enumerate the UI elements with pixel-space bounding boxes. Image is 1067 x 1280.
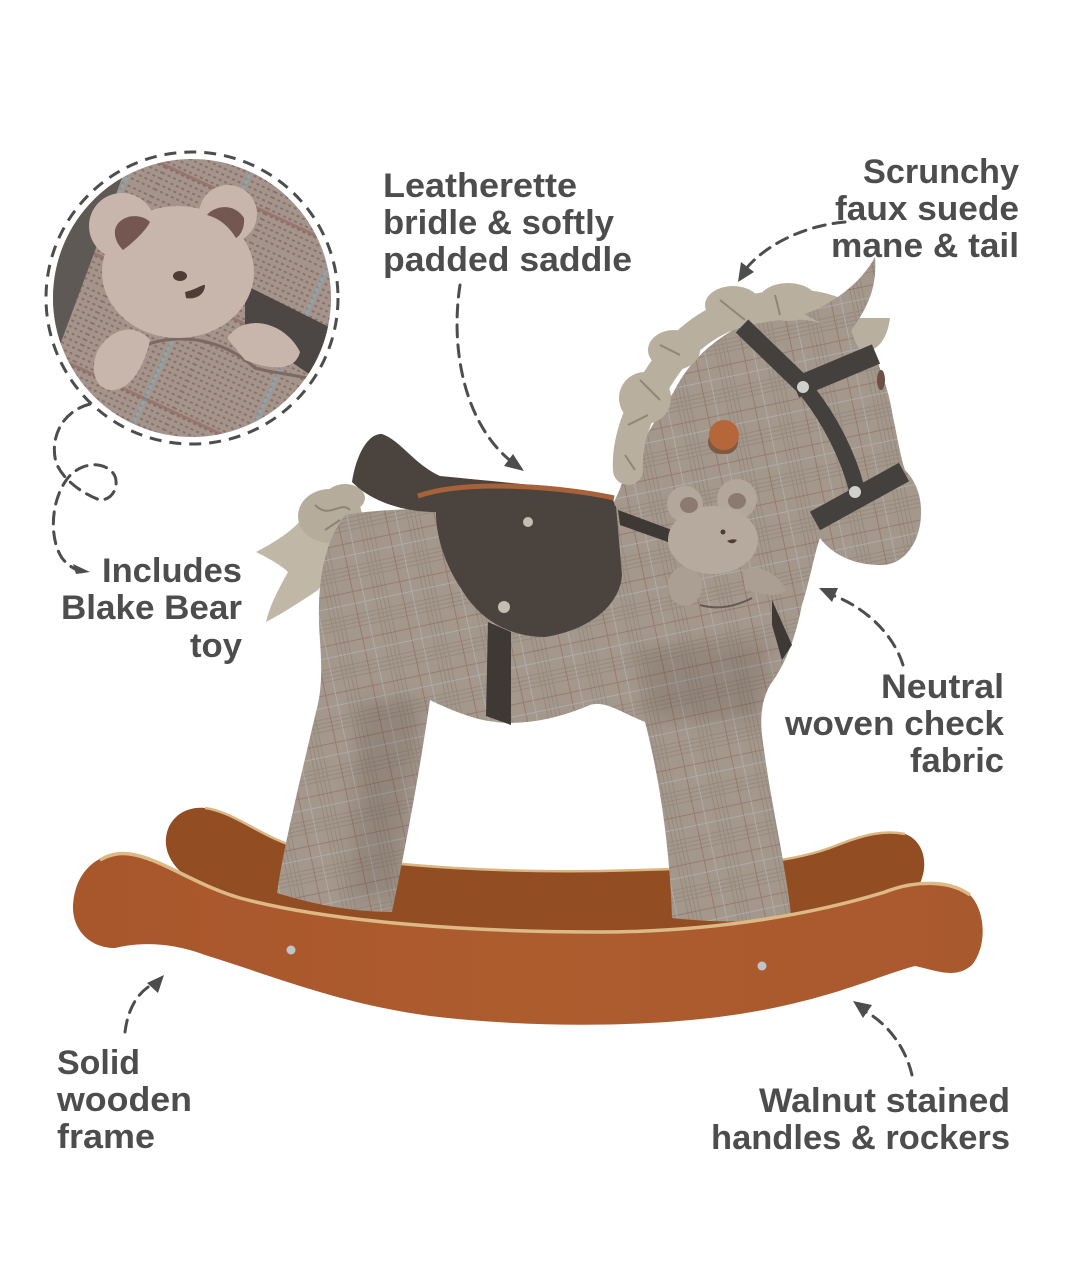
horse ear xyxy=(805,257,875,332)
bear inset: close-up photo xyxy=(46,152,338,444)
bridle rivets xyxy=(797,381,861,498)
front rocker xyxy=(73,853,983,1025)
label: rockers: Walnut stained xyxy=(759,1082,1010,1120)
label: mane: faux suede xyxy=(835,190,1019,228)
label: fabric: fabric xyxy=(910,742,1004,780)
rocker bolts xyxy=(286,946,766,970)
bear ears xyxy=(115,216,150,250)
label: bear xyxy=(61,552,242,665)
pocket rim xyxy=(148,338,307,380)
label: mane: Scrunchy xyxy=(863,153,1019,191)
arrow: saddle xyxy=(457,285,524,471)
label: bear: Includes xyxy=(102,552,242,590)
label: mane xyxy=(831,153,1019,265)
arrow: wooden frame xyxy=(125,975,164,1032)
arrow: fabric xyxy=(819,588,903,665)
label: fabric: Neutral xyxy=(881,668,1004,706)
label: saddle xyxy=(383,167,632,279)
inset photo xyxy=(50,155,335,440)
horse eye xyxy=(877,370,885,390)
bear head xyxy=(89,185,300,390)
saddle xyxy=(352,434,792,725)
back rocker xyxy=(166,808,924,945)
label: frame: Solid xyxy=(57,1044,140,1082)
label: frame: wooden xyxy=(56,1081,192,1119)
label: bear: Blake Bear xyxy=(61,589,242,627)
arrow: mane xyxy=(738,222,845,282)
label: saddle: padded saddle xyxy=(383,241,632,279)
arrow: rockers xyxy=(853,1001,912,1075)
bridle xyxy=(742,326,904,521)
bear face xyxy=(173,271,187,281)
label: frame xyxy=(56,1044,192,1156)
label: saddle: Leatherette xyxy=(383,167,577,205)
rocking horse illustration xyxy=(73,257,983,1025)
label: saddle: bridle & softly xyxy=(383,204,614,242)
horse body fabric xyxy=(277,318,921,921)
mane xyxy=(619,283,890,470)
label: rockers xyxy=(711,1082,1010,1157)
body shading xyxy=(350,640,770,900)
label: frame: frame xyxy=(57,1118,155,1156)
arrow: bear loop xyxy=(53,404,116,574)
mane folds xyxy=(625,295,780,470)
inset dashed ring xyxy=(46,152,338,444)
label: fabric xyxy=(784,668,1004,780)
label: bear: toy xyxy=(190,627,242,665)
tail xyxy=(256,484,365,622)
handle peg xyxy=(708,420,739,454)
small bear toy xyxy=(667,479,786,607)
label: rockers: handles & rockers xyxy=(711,1119,1010,1157)
label: mane: mane & tail xyxy=(831,227,1019,265)
label: fabric: woven check xyxy=(784,705,1004,743)
